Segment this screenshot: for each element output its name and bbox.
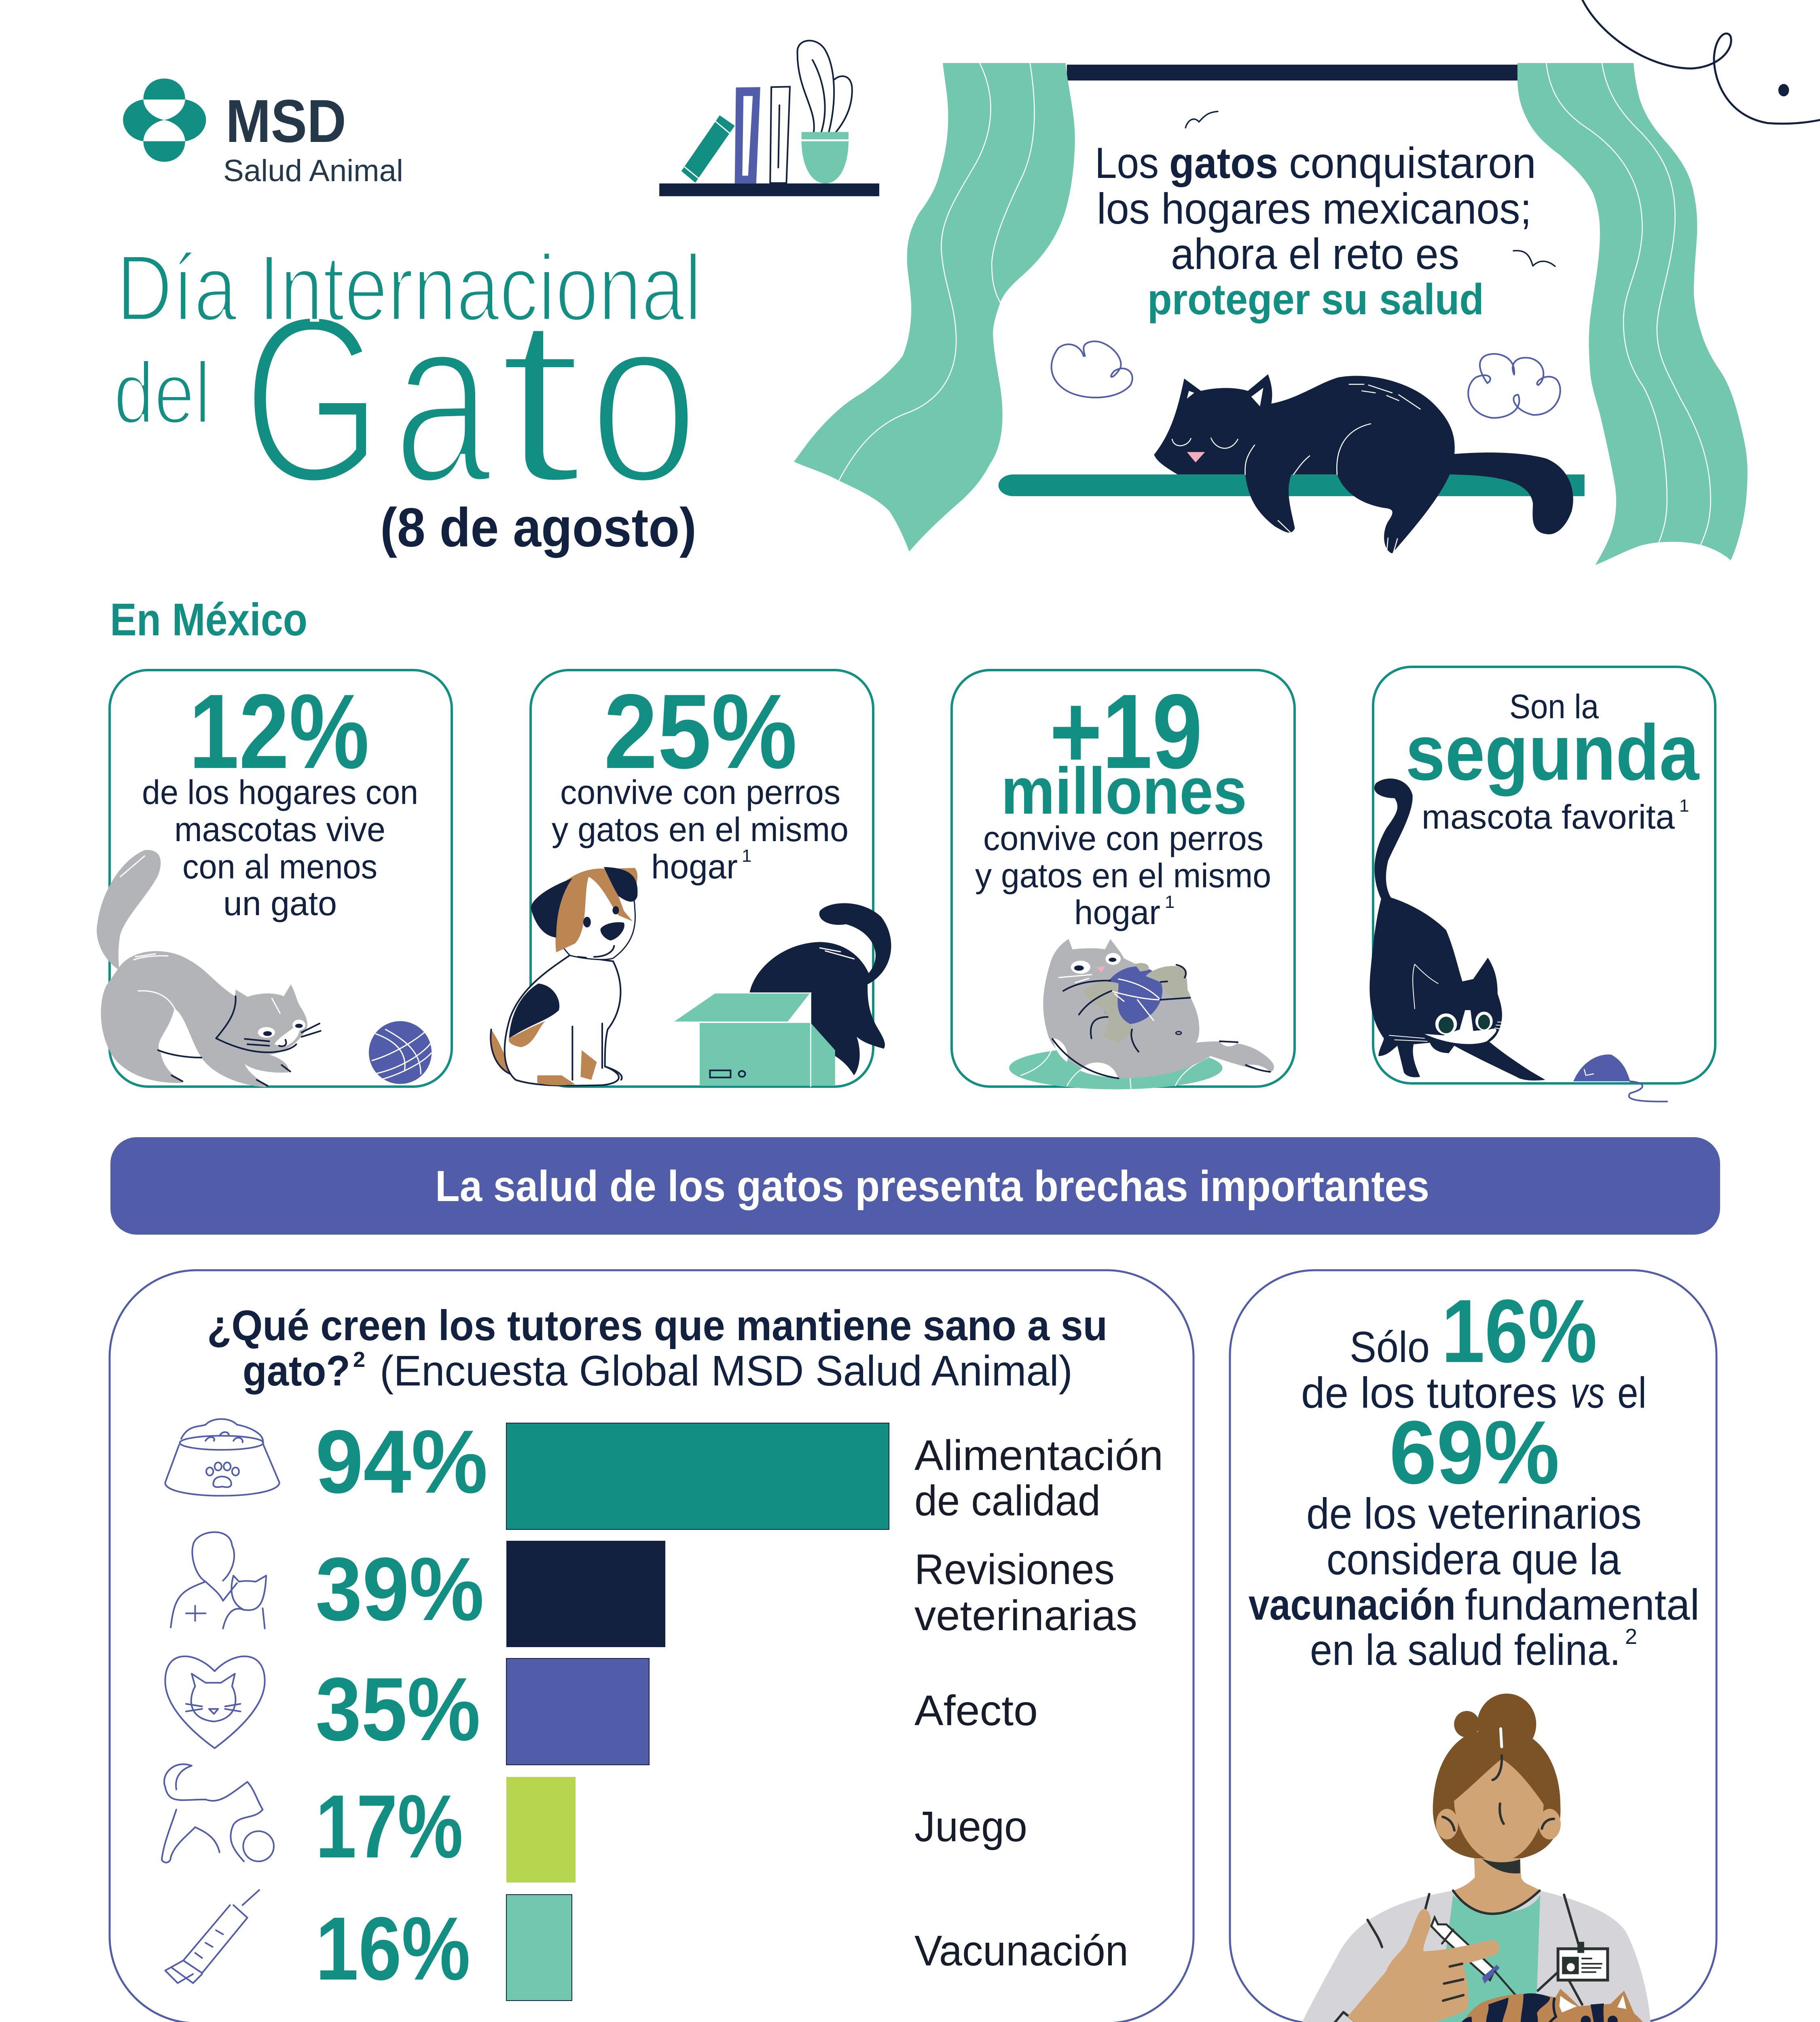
subtitle: date: (8 de agosto): [380, 497, 696, 558]
banner: La salud de los gatos presenta brechas importantes: [110, 1137, 1720, 1235]
panel: card 25%: 25%: [604, 672, 797, 791]
panel heading: 2: [353, 1347, 365, 1372]
bar: Vacunación 16%: 16%: [315, 1899, 470, 1999]
heading text: los gatos conquistaron: ahora el reto es: [1171, 229, 1459, 278]
panel: card +19 millones: +19: [1050, 672, 1202, 791]
panel: card segunda: 1: [1679, 796, 1689, 816]
panel: card +19 millones: [952, 670, 1295, 1087]
panel: card 12%: de los hogares con: [142, 773, 418, 811]
panel: card segunda: [1373, 667, 1715, 1083]
panel: card 25%: convive con perros: [560, 773, 840, 811]
bar: Vacunación 16%: [315, 1895, 1128, 2001]
panel: card segunda: segunda: [1405, 709, 1699, 797]
title: Gato: [243, 266, 699, 533]
panel: vaccination comparison: el: [1617, 1368, 1646, 1417]
panel: vaccination comparison: vacunación: [1249, 1580, 1456, 1629]
panel: survey bar chart: [110, 1270, 1194, 2022]
bar: Juego 17%: 17%: [315, 1777, 463, 1877]
panel: card +19 millones: y gatos en el mismo: [975, 857, 1271, 895]
panel heading: [207, 1302, 1107, 1395]
panel: card +19 millones: millones: [1001, 754, 1247, 828]
panel: card 25%: hogar: [651, 848, 738, 886]
panel: card 12%: mascotas vive: [174, 810, 385, 848]
heading text: los gatos conquistaron: proteger su salud: [1147, 275, 1484, 324]
bar: Alimentación de calidad 94%: 94%: [315, 1412, 488, 1512]
illustration: gray cat with yarn ball: [97, 850, 432, 1087]
heading text: los gatos conquistaron: conquistaron: [1289, 138, 1536, 187]
panel heading: gato?: [243, 1347, 350, 1395]
logo: MSD Salud Animal: [123, 78, 403, 188]
panel: card 12%: [110, 670, 452, 1087]
bar: Alimentación de calidad 94%: Alimentación: [914, 1432, 1163, 1479]
logo: MSD Salud Animal: MSD: [226, 87, 346, 155]
bar: Afecto 35%: 35%: [315, 1659, 480, 1760]
panel: card segunda: mascota favorita: [1422, 798, 1675, 836]
panel: vaccination comparison: [1230, 1270, 1716, 2022]
panel: card +19 millones: convive con perros: [983, 819, 1263, 857]
bar: Juego 17%: [315, 1777, 1027, 1882]
panel: vaccination comparison: 69%: [1389, 1402, 1560, 1503]
panel: vaccination comparison: en la salud felina.: [1310, 1625, 1621, 1674]
panel: vaccination comparison: vs: [1570, 1368, 1605, 1417]
bar: Afecto 35%: Afecto: [914, 1687, 1038, 1734]
heading text: los gatos conquistaron: gatos: [1169, 138, 1278, 187]
title: Día Internacional: Día Internacional: [116, 236, 702, 341]
illustration: box and black cat: [673, 903, 891, 1087]
title: Gato: o: [589, 266, 699, 533]
illustration: vet with syringe and tabby cat: [1277, 1694, 1671, 2022]
panel heading: (Encuesta Global MSD Salud Animal): [380, 1347, 1073, 1395]
illustration: window with curtains and sleeping cat: [794, 0, 1820, 565]
bar: Juego 17%: Juego: [914, 1803, 1027, 1851]
panel: vaccination comparison: 2: [1625, 1624, 1637, 1649]
bar: Alimentación de calidad 94%: de calidad: [914, 1477, 1100, 1525]
illustration: gray cat playing with yarn on cushion: [1009, 939, 1274, 1089]
icons: [162, 1419, 279, 1983]
panel: card +19 millones: hogar: [1074, 893, 1160, 931]
banner: La salud de los gatos presenta brechas importantes: La salud de los gatos presenta brechas importantes: [435, 1161, 1429, 1210]
illustration: shelf with books and plant: [659, 40, 879, 196]
logo: MSD Salud Animal: Salud Animal: [223, 154, 403, 188]
panel: vaccination comparison: Sólo: [1350, 1322, 1430, 1371]
panel: card 12%: un gato: [223, 884, 337, 922]
panel: vaccination comparison: de los tutores: [1301, 1368, 1557, 1417]
illustration: dog: [491, 867, 637, 1086]
heading text: los gatos conquistaron: [1095, 138, 1536, 324]
bar: Revisiones veterinarias 39%: veterinarias: [914, 1592, 1137, 1639]
illustration: black and white cat with mouse: [1369, 778, 1667, 1102]
panel: card 25%: [531, 670, 873, 1087]
panel: card +19 millones: 1: [1165, 892, 1175, 912]
panel: card 12%: 12%: [189, 672, 369, 791]
panel: card segunda: Son la: [1509, 687, 1599, 725]
panel: vaccination comparison: 16%: [1441, 1281, 1597, 1381]
title: Gato: G: [243, 266, 382, 533]
panel: card 12%: con al menos: [182, 848, 377, 886]
heading text: los gatos conquistaron: Los: [1095, 138, 1159, 187]
bar: Revisiones veterinarias 39%: [315, 1539, 1137, 1647]
panel: card 25%: y gatos en el mismo: [552, 810, 849, 848]
bar: Revisiones veterinarias 39%: 39%: [315, 1539, 484, 1639]
panel: vaccination comparison: considera que la: [1327, 1535, 1621, 1584]
bar: Vacunación 16%: Vacunación: [914, 1927, 1128, 1975]
bar: Revisiones veterinarias 39%: Revisiones: [914, 1546, 1115, 1593]
heading text: los gatos conquistaron: los hogares mexicanos;: [1097, 184, 1532, 233]
bar: Alimentación de calidad 94%: [315, 1412, 1163, 1529]
panel: vaccination comparison: de los veterinarios: [1306, 1489, 1642, 1538]
title: Gato: t: [497, 266, 585, 533]
title: del: del: [114, 344, 211, 442]
heading: En México: En México: [110, 594, 307, 645]
bar: Afecto 35%: [315, 1658, 1038, 1765]
title: Gato: a: [393, 266, 493, 533]
panel: vaccination comparison: fundamental: [1465, 1580, 1699, 1629]
panel heading: ¿Qué creen los tutores que mantiene sano a su: [207, 1302, 1107, 1349]
panel: card 25%: 1: [742, 846, 751, 866]
